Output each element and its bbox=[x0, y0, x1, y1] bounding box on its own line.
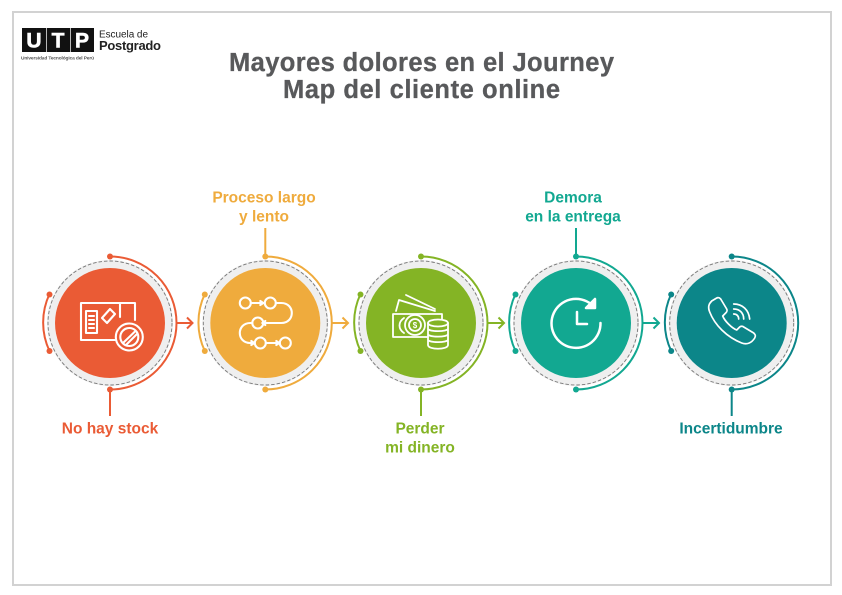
logo: UTP Escuela de Postgrado: P bbox=[75, 30, 89, 52]
arrow 2 bbox=[332, 318, 348, 328]
icon: phone with signal bbox=[709, 298, 755, 344]
label: Demora bbox=[544, 190, 602, 206]
label bbox=[212, 190, 316, 226]
label: Perder bbox=[395, 420, 445, 438]
logo: UTP Escuela de Postgrado: Universidad Tecnológica del Perú bbox=[21, 56, 94, 62]
label: No hay stock bbox=[62, 420, 159, 438]
step 4: Demora en la entrega bbox=[509, 190, 659, 392]
logo: UTP Escuela de Postgrado: Postgrado bbox=[99, 38, 161, 53]
label: Proceso largo bbox=[212, 190, 316, 206]
step 3: Perder mi dinero bbox=[354, 254, 504, 456]
label bbox=[525, 190, 621, 226]
step 1: No hay stock bbox=[43, 254, 192, 438]
title: Map del cliente online bbox=[283, 76, 560, 104]
arrow 3 bbox=[488, 318, 504, 328]
icon: box out of stock bbox=[81, 303, 143, 350]
title bbox=[229, 49, 615, 104]
label: y lento bbox=[239, 208, 289, 226]
label bbox=[385, 420, 455, 456]
title: Mayores dolores en el Journey bbox=[229, 49, 615, 77]
logo: UTP Escuela de Postgrado: Escuela de bbox=[99, 30, 148, 40]
step 5: Incertidumbre bbox=[665, 254, 798, 438]
logo: UTP Escuela de Postgrado: T bbox=[52, 30, 65, 52]
icon: banknotes and coins bbox=[393, 295, 448, 349]
icon: winding process path bbox=[240, 298, 292, 348]
label: mi dinero bbox=[385, 440, 455, 456]
label: Incertidumbre bbox=[679, 420, 783, 438]
icon: clock with refresh arrow bbox=[552, 299, 601, 348]
label: en la entrega bbox=[525, 208, 621, 226]
step 2: Proceso largo y lento bbox=[198, 190, 348, 392]
arrow 4 bbox=[643, 318, 659, 328]
arrow 1 bbox=[176, 318, 192, 328]
logo: UTP Escuela de Postgrado bbox=[21, 28, 161, 62]
logo: UTP Escuela de Postgrado: U bbox=[26, 30, 42, 52]
icon: banknotes and coins: $ bbox=[413, 321, 418, 330]
